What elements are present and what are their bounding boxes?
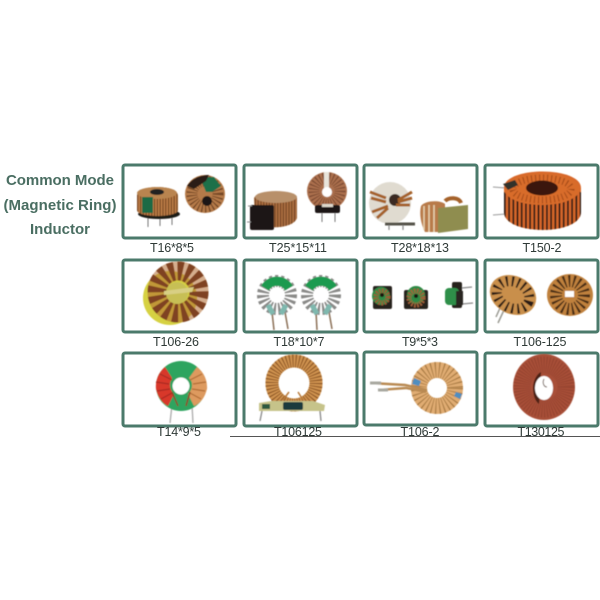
- labels row one: T25*15*11: [269, 241, 327, 255]
- panel: T150-2: [485, 165, 598, 238]
- labels row two: T18*10*7: [274, 335, 325, 349]
- small inductor three: [445, 282, 473, 308]
- labels row two: T9*5*3: [402, 335, 438, 349]
- inductor ball: [185, 175, 225, 213]
- title: Common Mode: [6, 172, 114, 189]
- labels row two: T106-26: [153, 335, 199, 349]
- toroid with leads: [370, 370, 462, 406]
- labels row one: T150-2: [522, 241, 562, 255]
- panel: T106125: [244, 353, 357, 426]
- tilted toroid: [483, 268, 543, 323]
- panel: T16*8*5: [123, 165, 236, 238]
- panel: T9*5*3: [364, 260, 477, 332]
- title: Inductor: [30, 221, 90, 238]
- panel: T28*18*13: [364, 165, 477, 238]
- title: [4, 172, 116, 238]
- panel: T106-125: [483, 260, 598, 332]
- labels row one: [150, 241, 562, 255]
- panel: T106-2: [364, 352, 477, 425]
- panel: T106-26: [123, 260, 236, 332]
- large toroid: [493, 172, 581, 230]
- inductor on base: [137, 187, 180, 227]
- toroid on PCB: [259, 361, 325, 421]
- title: (Magnetic Ring): [4, 197, 116, 214]
- panel: T18*10*7: [244, 260, 357, 332]
- panel: T130125: [485, 353, 598, 426]
- twin toroid right: [307, 281, 335, 330]
- inductor with plate: [420, 198, 468, 233]
- labels row two: T106-125: [514, 335, 567, 349]
- dark copper toroid: [513, 354, 575, 420]
- labels row three: T14*9*5: [157, 425, 201, 439]
- labels row two: [153, 335, 567, 349]
- twin toroid left: [263, 281, 291, 330]
- labels row three: [157, 425, 565, 439]
- labels row one: T16*8*5: [150, 241, 194, 255]
- tri-colour toroid: [156, 361, 207, 423]
- small inductor two: [404, 286, 428, 309]
- flat toroid: [547, 274, 593, 316]
- panel: T25*15*11: [244, 165, 357, 238]
- inductor upright: [307, 172, 347, 222]
- labels row three: T106125: [274, 425, 322, 439]
- panel: T14*9*5: [123, 353, 236, 426]
- yellow toroid: [143, 271, 199, 325]
- small inductor one: [372, 286, 392, 309]
- labels row three: T130125: [518, 425, 565, 439]
- inductor with black bobbin: [247, 191, 297, 230]
- labels row one: T28*18*13: [391, 241, 449, 255]
- inductor white ring: [369, 182, 415, 230]
- labels row three: T106-2: [400, 425, 440, 439]
